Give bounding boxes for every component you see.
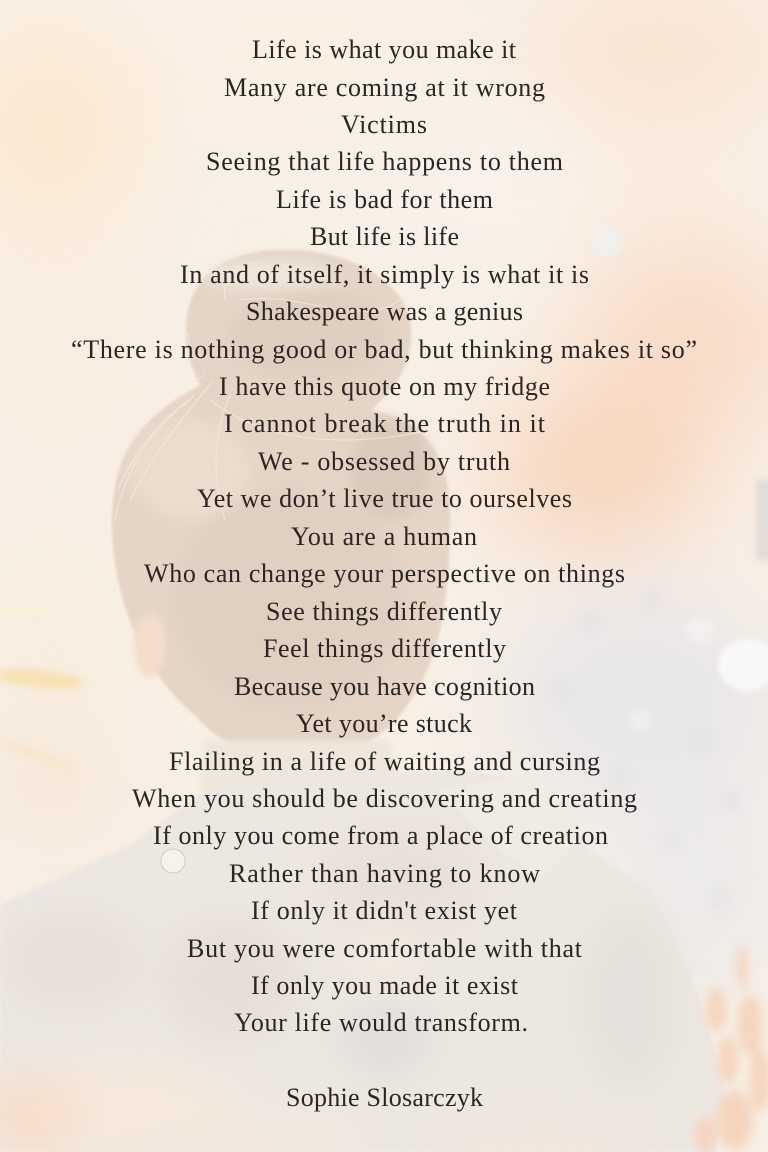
poem text: In and of itself, it simply is what it is — [180, 260, 589, 289]
poem text: Flailing in a life of waiting and cursing — [169, 747, 600, 776]
poem text: If only it didn't exist yet — [251, 896, 518, 925]
stray hair strands — [92, 262, 430, 520]
poem text: Life is bad for them — [276, 185, 493, 214]
poem text: Feel things differently — [263, 634, 506, 663]
poem text: Shakespeare was a genius — [246, 297, 523, 326]
neck — [204, 740, 392, 786]
poem text: When you should be discovering and creating — [132, 784, 637, 813]
poem text: You are a human — [291, 522, 477, 551]
poem text: Yet we don’t live true to ourselves — [197, 484, 572, 513]
poem text: Because you have cognition — [234, 672, 535, 701]
poem text — [71, 35, 697, 1037]
poem text: Victims — [341, 110, 427, 139]
poem text: We - obsessed by truth — [258, 447, 510, 476]
poem text: Your life would transform. — [234, 1008, 528, 1037]
figure: woman's hair and bun — [92, 250, 450, 790]
background detail: pebble speckles — [636, 624, 706, 724]
poem text: “There is nothing good or bad, but thinking makes it so” — [71, 335, 697, 364]
jacket button — [161, 849, 185, 873]
poem text: Many are coming at it wrong — [224, 73, 545, 102]
poem text: I cannot break the truth in it — [224, 409, 546, 438]
poem text: Yet you’re stuck — [296, 709, 472, 738]
author signature: Sophie Slosarczyk — [286, 1083, 483, 1112]
ear — [134, 613, 166, 677]
foreground blur: peach grasses — [0, 946, 768, 1152]
poem text: If only you come from a place of creation — [153, 821, 608, 850]
poem text: Seeing that life happens to them — [206, 147, 563, 176]
poem text: Life is what you make it — [252, 35, 517, 64]
poem text: But you were comfortable with that — [187, 934, 583, 963]
poem text: If only you made it exist — [251, 971, 519, 1000]
poem text: But life is life — [310, 222, 459, 251]
background detail: bokeh highlights — [0, 224, 768, 774]
figure: jacket — [0, 770, 727, 1152]
poem text: Who can change your perspective on things — [144, 559, 625, 588]
poem text: Rather than having to know — [229, 859, 540, 888]
poem text: I have this quote on my fridge — [219, 372, 550, 401]
poem text: See things differently — [266, 597, 502, 626]
